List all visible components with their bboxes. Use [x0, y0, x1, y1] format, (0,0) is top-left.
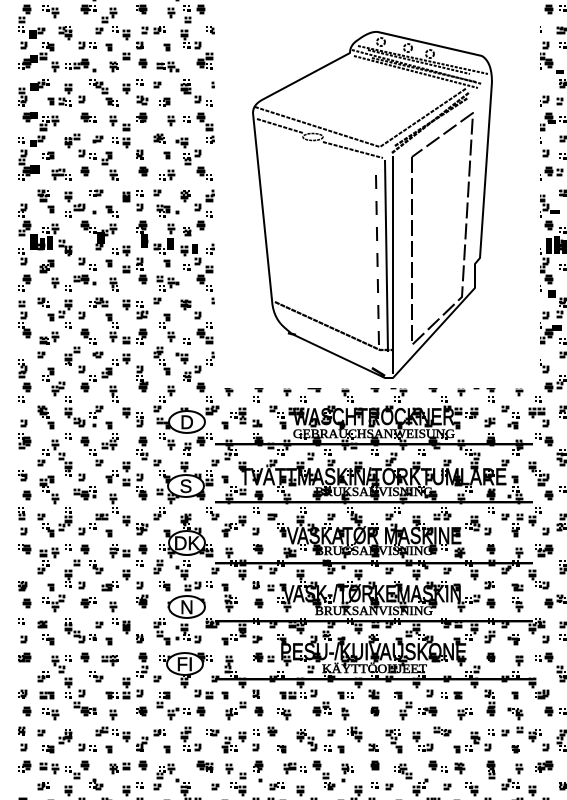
- door handle: [303, 134, 323, 140]
- language row: D: [169, 404, 533, 445]
- badge D: [169, 411, 205, 434]
- subheading: Bruksanvisning: BRUKSANVISNING: [315, 484, 433, 499]
- heading: Vask-/Torkemaskin: VASK-/TØRKEMASKIN: [283, 581, 462, 608]
- subheading: Bruksanvisning: BRUKSANVISNING: [315, 603, 433, 618]
- badge FI: [167, 653, 203, 676]
- base strip: [275, 302, 392, 350]
- lid front edge: [255, 88, 467, 147]
- badge N: [169, 596, 205, 619]
- badge DK: DK: [174, 534, 201, 555]
- washer-dryer illustration: [253, 32, 492, 378]
- language row: S: [168, 464, 533, 503]
- badge S: S: [180, 477, 192, 498]
- language row: DK: [169, 523, 533, 564]
- heading: Waschtrockner: WASCHTROCKNER: [293, 404, 455, 431]
- subheading: Brugsanvisning: BRUGSANVISNING: [315, 543, 433, 558]
- badge FI: FI: [177, 655, 193, 676]
- front inner vertical: [376, 175, 379, 345]
- subheading: Käyttöohjeet: KÄYTTÖOHJEET: [322, 661, 427, 676]
- feet: [288, 333, 385, 376]
- badge S: [168, 475, 204, 498]
- control panel: [352, 38, 488, 88]
- heading: Vaskatør maskine: VASKATØR MASKINE: [287, 523, 462, 550]
- language row: N: [169, 581, 533, 622]
- side door panel: [412, 113, 473, 345]
- badge N: N: [180, 598, 194, 619]
- badge DK: [169, 531, 205, 555]
- front panel top edge: [257, 119, 383, 158]
- heading: Pesu-/Kuivauskone: PESU-/KUIVAUSKONE: [280, 639, 467, 666]
- subheading: Gebrauchsanweisung: GEBRAUCHSANWEISUNG: [293, 426, 455, 441]
- cabinet corner lines: [385, 156, 393, 374]
- badge D: D: [180, 413, 194, 434]
- language row: FI: [167, 639, 533, 680]
- cabinet outline: [253, 32, 492, 378]
